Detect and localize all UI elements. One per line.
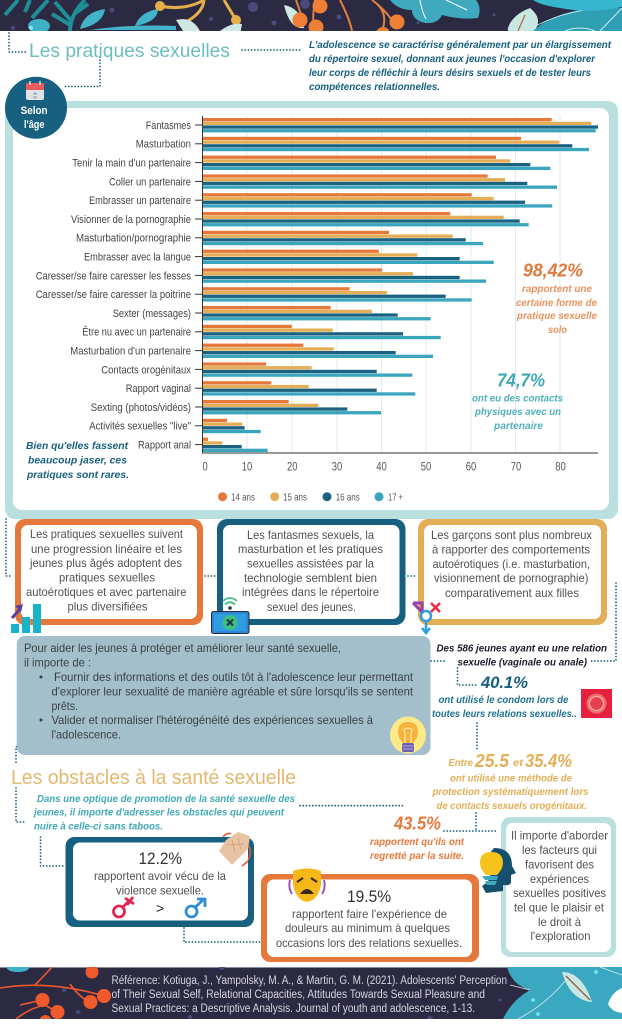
row: Rapport vaginal [126,381,415,396]
x axis labels: 60 [466,462,476,474]
card: garçons: à rapporter des comportements [432,544,590,556]
card: violence sexuelle: rapportent avoir vécu de la [94,870,227,883]
x axis labels: 50 [421,462,431,474]
icon: rising bars [11,604,41,633]
stat: 43.5% [370,814,464,862]
card: progression linéaire: jeunes plus âgés adoptent des [29,557,182,570]
card: violence sexuelle: violence sexuelle. [116,885,204,898]
legend: 17 + [388,492,403,504]
card: progression linéaire: plus diversifiées [68,600,148,614]
note: pratiques rares: beaucoup jaser, ces [28,455,127,467]
card: progression linéaire [11,519,203,633]
stats: condom use [432,642,607,720]
intro text [309,39,611,93]
title: les pratiques sexuelles: Les pratiques sexuelles [29,40,230,62]
card: progression linéaire: une progression linéaire et les [31,543,182,556]
card: garçons: comparativement aux filles [445,587,579,600]
stat: 43.5%: rapportent qu'ils ont [370,836,464,848]
callout: 74,7% [472,370,563,432]
icon: male symbol [186,899,205,917]
card: progression linéaire: autoérotiques et avec partenaire [26,586,186,599]
row: Contacts orogénitaux [101,362,412,377]
card: expériences positives: le droit à [538,916,582,929]
stats: protection: 35.4% [525,751,572,771]
stats: protection: Entre [448,757,473,769]
callout: 98,42% [516,260,597,336]
x axis labels: 30 [332,462,342,474]
note: pratiques rares: Bien qu'elles fassent [26,440,128,452]
panel: recommandations: prêts. [52,700,78,713]
bottom reference banner [0,964,622,1024]
card: expériences positives: expériences [530,873,589,886]
card: fantasmes et technologie: technologie semblent bien [244,572,377,585]
stats: condom use: sexuelle (vaginale ou anale) [458,656,587,668]
card: expériences positives: Il importe d'aborder [511,830,608,843]
x axis labels: 0 [202,462,208,474]
stats: condom use: toutes leurs relations sexuelles.. [432,708,577,720]
stats: protection: et [513,757,524,769]
row: Caresser les fesses: Caresser/se faire caresser les fesses [36,270,191,282]
row: Sexter [113,306,431,320]
card: expériences positives: les facteurs qui [522,844,597,857]
callout: 74,7%: 74,7% [497,370,545,390]
card: douleurs: occasions lors des relations sexuelles. [276,937,462,950]
stat: 43.5%: regretté par la suite. [370,850,464,862]
stat: 43.5%: 43.5% [393,814,441,834]
card: douleurs: rapportent faire l'expérience de [292,908,447,921]
note: pratiques rares: pratiques sont rares. [26,469,129,481]
row: Embrasser avec la langue [84,250,494,264]
legend: 14 ans [231,492,255,504]
row: Masturbation [136,137,589,151]
stats: protection: 25.5 [474,751,510,771]
legend: 15 ans [283,492,307,504]
card: fantasmes et technologie [212,519,406,634]
row: Embrasser: Embrasser un partenaire [89,195,191,207]
panel: recommandations: Pour aider les jeunes à protéger et améliorer leur santé sexuelle, [24,642,341,655]
card: expériences positives: tel que le plaisir et [514,902,605,914]
row: Être nu: Être nu avec un partenaire [82,326,191,339]
icon: light bulb [390,716,426,754]
row: Visionner: Visionner de la pornographie [71,214,191,226]
row: Masturbation d'un partenaire: Masturbation d'un partenaire [70,346,191,358]
card: progression linéaire: Les pratiques sexuelles suivent [30,528,184,541]
card: expériences positives: l'exploration [530,930,590,943]
panel: recommandations: Valider et normaliser l'hétérogénéité des expériences sexuelles à [52,714,374,727]
row: Masturbation/pornographie [76,231,483,245]
card: fantasmes et technologie: masturbation et les pratiques [238,543,383,556]
row: Caresser les fesses [36,268,486,283]
row: Embrasser avec la langue: Embrasser avec la langue [84,252,191,264]
text: obstacles intro: nuire à celle-ci sans taboos. [34,821,163,833]
legend: 16 ans [336,492,360,504]
row: Rapport vaginal: Rapport vaginal [126,383,191,395]
x axis labels: 40 [376,462,387,474]
row: Masturbation d'un partenaire [70,344,433,358]
card: douleurs: douleurs au minimum à quelques [285,922,450,935]
row: Visionner [71,212,529,226]
card: garçons [413,519,607,633]
text: obstacles intro [32,793,295,833]
stats: protection [432,751,589,812]
icon: gender symbols [413,603,440,633]
panel: recommandations [17,636,430,755]
card: fantasmes et technologie: Les fantasmes sexuels, la [247,529,375,542]
card: expériences positives: favorisent des [525,858,594,872]
icon: calendar [26,81,44,100]
card: fantasmes et technologie: intégrées dans le répertoire [242,586,379,599]
stats: protection: protection systématiquement lors [432,786,589,798]
x axis labels: 80 [555,462,566,474]
icon: condom [581,689,612,718]
callout: 98,42%: solo [548,324,568,336]
callout: 98,42%: rapportent une [522,283,592,295]
callout: 98,42%: 98,42% [523,260,583,280]
callout: 98,42%: pratique sexuelle [516,310,597,322]
card: fantasmes et technologie: sexuelles assistées par la [247,558,375,570]
heading: les obstacles: Les obstacles à la santé sexuelle [11,767,296,789]
intro text: leur corps de réfléchir à leurs désirs sexuels et de tester leurs [309,67,591,79]
icon: head with bulb [480,848,516,893]
row: Tenir la main: Tenir la main d'un partenaire [72,158,191,170]
stats: protection: ont utilisé une méthode de [450,772,572,784]
icon: sad mask [289,868,325,902]
row: Fantasmes [146,118,598,132]
row: Sexting [91,400,381,414]
reference text [112,975,507,1015]
row: Tenir la main [72,156,550,170]
row: Sexter: Sexter (messages) [113,308,191,320]
row: Rapport anal [138,438,268,452]
row: Être nu [82,325,441,339]
row: Rapport anal: Rapport anal [138,440,191,452]
panel: recommandations: l'adolescence. [52,728,121,742]
icon: male symbol with cross [114,897,134,917]
card: violence sexuelle: 12.2% [138,849,182,868]
row: Masturbation: Masturbation [136,139,191,151]
card: violence sexuelle [66,832,254,927]
icon: tablet and wifi [212,598,249,634]
reference text: of Their Sexual Self, Relational Capacities, Attitudes Towards Sexual Pleasure and [112,989,485,1001]
card: douleurs [261,868,479,962]
row: Coller: Coller un partenaire [109,176,191,188]
text: obstacles intro: jeunes, il importe d'adresser les obstacles qui peuvent [32,807,284,819]
row: Activités live [89,419,261,433]
panel: recommandations: il importe de : [24,657,91,670]
panel: recommandations: d'explorer leur sexualité de manière agréable et sûre lorsqu'ils se sentent [52,686,414,698]
card: douleurs: 19.5% [347,887,391,906]
intro text: compétences relationnelles. [309,81,440,93]
callout: 74,7%: ont eu des contacts [472,393,563,405]
stats: condom use: 40.1% [480,673,528,692]
panel: recommandations: Fournir des informations et des outils tôt à l'adolescence leur permettant [54,671,414,684]
x axis labels: 70 [511,462,521,474]
stats: condom use: Des 586 jeunes ayant eu une relation [436,642,607,654]
callout: 74,7%: physiques avec un [474,406,561,418]
top decorative banner [0,0,622,41]
card: fantasmes et technologie: sexuel des jeunes. [267,601,356,614]
callout: 98,42%: certaine forme de [516,297,597,309]
horizontal bar chart [36,116,598,474]
badge: selon l'âge: Selon [21,105,48,117]
card: garçons: visionnement de pornographie) [434,572,589,585]
x axis labels: 10 [242,462,252,474]
card: progression linéaire: pratiques sexuelles [59,572,155,584]
badge: selon l'âge: l'âge [24,119,44,131]
x axis labels [202,462,566,474]
row: Caresser la poitrine: Caresser/se faire caresser la poitrine [36,289,191,301]
reference text: Référence: Kotiuga, J., Yampolsky, M. A., & Martin, G. M. (2021). Adolescents' Perception [112,975,507,987]
row: Masturbation/pornographie: Masturbation/pornographie [76,233,191,245]
card: expériences positives: sexuelles positives [513,887,606,900]
stats: condom use: ont utilisé le condom lors de [438,694,569,706]
badge: selon l'âge [5,77,67,139]
card: violence sexuelle: > [156,900,164,916]
row: Fantasmes: Fantasmes [146,120,191,132]
text: obstacles intro: Dans une optique de promotion de la santé sexuelle des [37,793,295,805]
row: Activités live: Activités sexuelles "live" [89,421,191,433]
callout: 74,7%: partenaire [493,420,543,432]
reference text: Sexual Practices: a Descriptive Analysis. Journal of youth and adolescence, 1-13. [112,1003,475,1015]
card: expériences positives [501,817,616,957]
intro text: du répertoire sexuel, donnant aux jeunes l'occasion d'explorer [309,53,596,65]
card: garçons: Les garçons sont plus nombreux [431,529,592,542]
note: pratiques rares [26,440,129,481]
row: Contacts orogénitaux: Contacts orogénitaux [101,364,191,376]
row: Caresser la poitrine [36,287,472,302]
row: Sexting: Sexting (photos/vidéos) [91,402,191,414]
x axis labels: 20 [287,462,298,474]
card: garçons: autoérotiques (i.e. masturbation, [432,558,590,571]
row: Coller [109,174,557,189]
icon: raised fist [219,832,250,866]
row: Embrasser [89,193,552,208]
stats: protection: de contacts sexuels orogénitaux. [436,800,587,812]
legend [218,492,403,504]
